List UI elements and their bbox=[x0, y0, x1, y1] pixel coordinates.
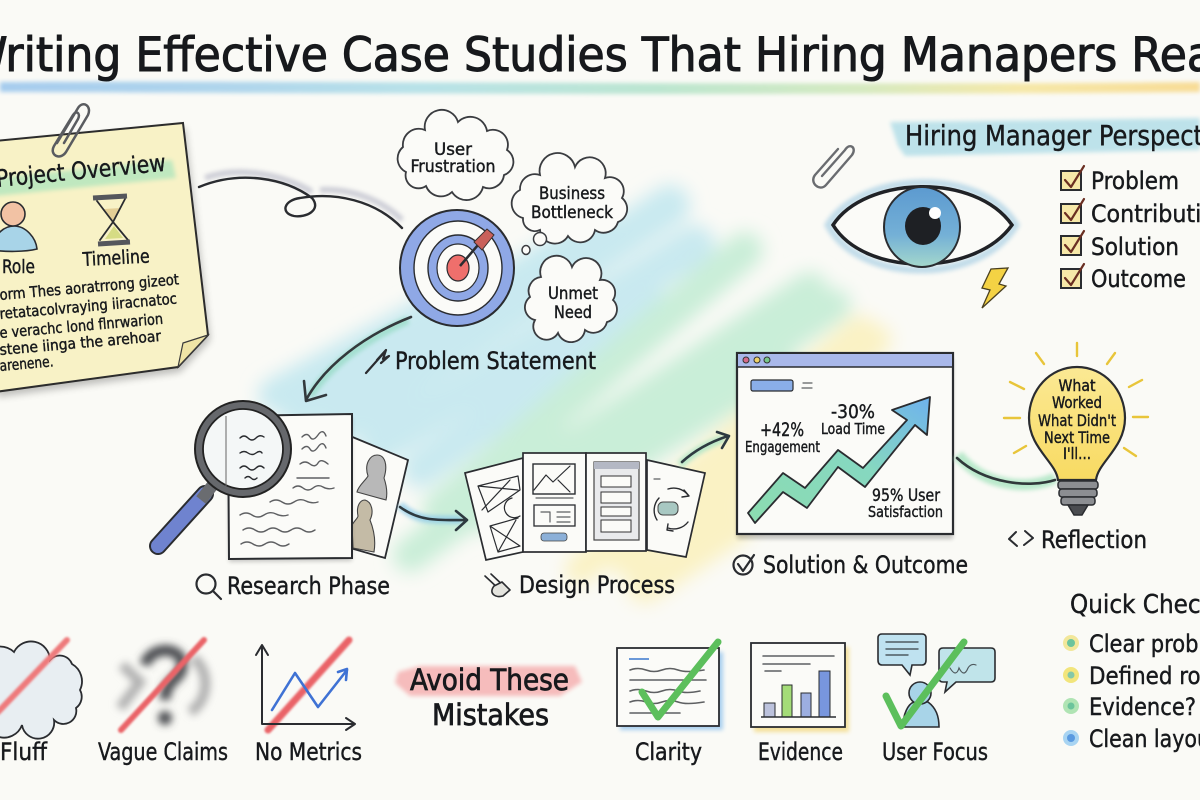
bulb text: What bbox=[1058, 376, 1096, 395]
chart: rising arrow bbox=[748, 397, 930, 523]
label: problem statement: Problem Statement bbox=[395, 347, 596, 375]
bulb text: I'll... bbox=[1063, 444, 1091, 463]
bulb base bbox=[1058, 481, 1098, 515]
icon: magnifying glass bbox=[158, 401, 291, 546]
metric: engagement: Engagement bbox=[745, 438, 820, 456]
heading highlight bbox=[890, 118, 1200, 156]
bulb glass bbox=[1029, 367, 1125, 480]
note paper bbox=[0, 128, 210, 397]
label: role: Role bbox=[2, 256, 35, 278]
bulb text bbox=[1038, 376, 1116, 463]
heading highlight bbox=[0, 160, 176, 196]
browser button bbox=[751, 380, 793, 391]
metric: engagement bbox=[745, 419, 820, 456]
note body text: orm Thes aoratrrong gizeot bbox=[0, 270, 180, 304]
icon: reflection lightbulb bbox=[1004, 343, 1148, 515]
panel: research phase illustration bbox=[158, 401, 408, 562]
panel: project overview sticky note bbox=[0, 104, 210, 397]
icon: lightning bolt bbox=[982, 268, 1008, 308]
browser title bar bbox=[738, 354, 952, 367]
thought cloud: business bottleneck: Business bbox=[539, 184, 605, 204]
label: timeline: Timeline bbox=[81, 246, 150, 271]
metric: satisfaction bbox=[868, 486, 943, 521]
avoid heading underline bbox=[420, 729, 561, 733]
heading: project overview: Project Overview bbox=[0, 149, 167, 193]
practice: clarity: Clarity bbox=[635, 738, 702, 766]
metric: load time bbox=[821, 401, 885, 438]
bulb text: What Didn't bbox=[1038, 411, 1116, 430]
icon: role person bbox=[0, 202, 37, 251]
watercolor wash: central diagonal brush streaks bbox=[275, 205, 875, 585]
bulb text: Next Time bbox=[1044, 428, 1110, 447]
note body text: retatacolvraying iiracnatoc bbox=[0, 290, 178, 323]
icon: check circle bbox=[734, 555, 754, 574]
title underline stripe bbox=[0, 82, 1200, 94]
bulb text: Worked bbox=[1052, 393, 1102, 412]
arrow: problem to research bbox=[304, 317, 411, 401]
thought cloud: user frustration: Frustration bbox=[410, 157, 496, 177]
icon: hiring manager eye bbox=[828, 183, 1016, 270]
metric: satisfaction: Satisfaction bbox=[868, 503, 943, 521]
thought cloud: user frustration bbox=[398, 110, 513, 200]
metric: engagement: +42% bbox=[760, 419, 804, 441]
window dots bbox=[743, 357, 770, 363]
wireframe page three bbox=[586, 453, 646, 551]
arrow: design to solution bbox=[680, 432, 729, 465]
panel: quick check list bbox=[1063, 590, 1200, 753]
checklist: solution bbox=[1061, 231, 1179, 261]
mistake: no metrics bbox=[255, 640, 362, 766]
note body text bbox=[0, 270, 180, 375]
heading: avoid these mistakes: Mistakes bbox=[432, 698, 549, 732]
checklist: outcome: Outcome bbox=[1091, 265, 1186, 293]
thought cloud: business bottleneck: Bottleneck bbox=[531, 203, 613, 223]
mistake: fluff: Fluff bbox=[0, 738, 48, 766]
title: Writing Effective Case Studies That Hiring Manapers Read bbox=[0, 28, 1200, 83]
practice: clarity bbox=[617, 642, 723, 766]
metric: load time: Load Time bbox=[821, 420, 885, 438]
practice: user focus bbox=[878, 634, 995, 766]
metric: satisfaction: 95% User bbox=[872, 486, 941, 506]
icon: hourglass timeline bbox=[93, 196, 130, 244]
panel: good practices bbox=[617, 634, 995, 766]
label: solution and outcome: Solution & Outcome bbox=[763, 551, 968, 579]
thought cloud: unmet need bbox=[525, 256, 617, 342]
bulb rays bbox=[1004, 343, 1148, 456]
wireframe page one bbox=[465, 458, 523, 560]
note body text: e verachc lond flnrwarion bbox=[0, 310, 164, 342]
practice: evidence: Evidence bbox=[758, 738, 843, 766]
panel: design process wireframes bbox=[465, 453, 705, 560]
research paper bbox=[228, 414, 352, 562]
thought cloud: user frustration: User bbox=[434, 140, 473, 160]
metric: load time: -30% bbox=[831, 401, 875, 423]
practice: user focus: User Focus bbox=[882, 738, 988, 766]
arrow: research to design bbox=[400, 505, 467, 530]
icon: paperclip near eye bbox=[813, 146, 854, 188]
arrow: solution to reflection bbox=[957, 455, 1055, 485]
mistake: fluff bbox=[0, 640, 82, 766]
wireframe page four bbox=[647, 460, 705, 557]
label: research phase: Research Phase bbox=[227, 572, 390, 600]
mistake: vague claims: Vague Claims bbox=[98, 738, 228, 766]
checklist: problem: Problem bbox=[1091, 167, 1179, 195]
avoid heading highlight bbox=[395, 666, 582, 696]
item: evidence: Evidence? bbox=[1089, 693, 1196, 721]
label: reflection: Reflection bbox=[1041, 526, 1147, 554]
arrow: swirl from overview to problem bbox=[199, 172, 402, 228]
icon: problem target bbox=[400, 210, 514, 326]
note body text: arenene. bbox=[0, 352, 54, 375]
heading: avoid these mistakes bbox=[410, 663, 569, 732]
note body text: stene iinga the arehoar bbox=[0, 327, 162, 359]
bar chart bbox=[761, 671, 836, 717]
icon: search bbox=[196, 574, 221, 599]
wireframe page two bbox=[523, 453, 586, 552]
icon: diamond brackets bbox=[1009, 531, 1033, 546]
icon: brush bbox=[485, 574, 510, 597]
mistake: no metrics: No Metrics bbox=[255, 738, 362, 766]
panel: avoid these mistakes bbox=[0, 640, 582, 766]
thought cloud: unmet need: Need bbox=[554, 303, 592, 323]
panel: hiring manager perspective bbox=[890, 118, 1200, 293]
panel: solution and outcome browser window bbox=[737, 353, 953, 539]
thought bubbles: small circles bbox=[522, 232, 546, 254]
icon: paperclip bbox=[53, 104, 89, 156]
heading underline bbox=[1071, 620, 1200, 624]
heading: avoid these mistakes: Avoid These bbox=[410, 663, 569, 697]
checklist: solution: Solution bbox=[1091, 233, 1179, 261]
mistake: vague claims bbox=[98, 640, 228, 766]
thought cloud: unmet need: Unmet bbox=[548, 284, 598, 304]
icon: small dart bbox=[366, 350, 389, 373]
label: design process: Design Process bbox=[519, 571, 675, 599]
persona card bbox=[350, 436, 408, 558]
practice: evidence bbox=[751, 643, 849, 766]
thought cloud: business bottleneck bbox=[512, 153, 627, 244]
